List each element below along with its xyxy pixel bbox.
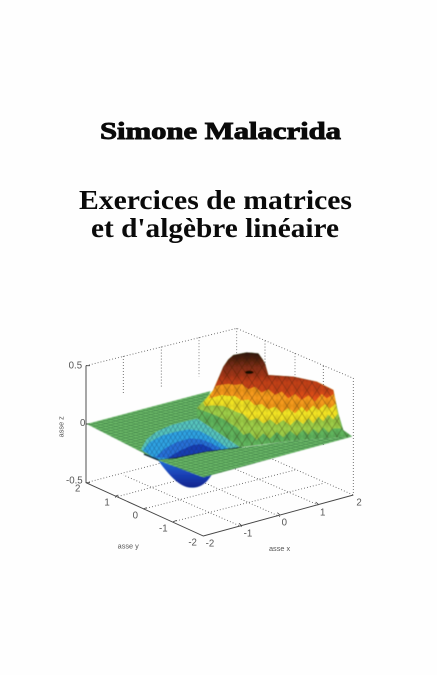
axis labels: 0 — [282, 518, 287, 529]
plot grid and axes — [86, 328, 353, 536]
axis labels: 2 — [356, 497, 362, 508]
axis labels: -0.5 — [66, 475, 83, 486]
hump colour bands — [197, 352, 352, 447]
book title: et d'algèbre linéaire — [91, 213, 339, 243]
author name: Simone Malacrida — [100, 119, 341, 145]
axis labels: 2 — [75, 484, 80, 495]
axis labels: 0.5 — [69, 361, 82, 372]
axis labels: -2 — [188, 538, 197, 549]
axis labels: 0 — [133, 510, 138, 521]
axis labels: -2 — [206, 539, 214, 550]
axis labels: asse y — [118, 541, 139, 550]
book title: Exercices de matrices — [79, 185, 352, 215]
axis labels — [57, 361, 362, 553]
3D surface plot — [57, 328, 362, 553]
axis labels: -1 — [159, 523, 168, 534]
green plane: back left — [87, 391, 211, 461]
negative bowl underside — [157, 459, 213, 488]
green plane: front — [157, 437, 352, 477]
axis labels: asse z — [57, 416, 66, 437]
axis labels: -1 — [244, 529, 252, 540]
axis labels: 1 — [104, 497, 110, 508]
surface — [87, 352, 352, 488]
axis labels: 0 — [80, 418, 85, 429]
book title — [79, 185, 352, 243]
axis labels: asse x — [269, 544, 291, 553]
bowl bands — [141, 419, 242, 460]
axis labels: 1 — [320, 508, 325, 519]
